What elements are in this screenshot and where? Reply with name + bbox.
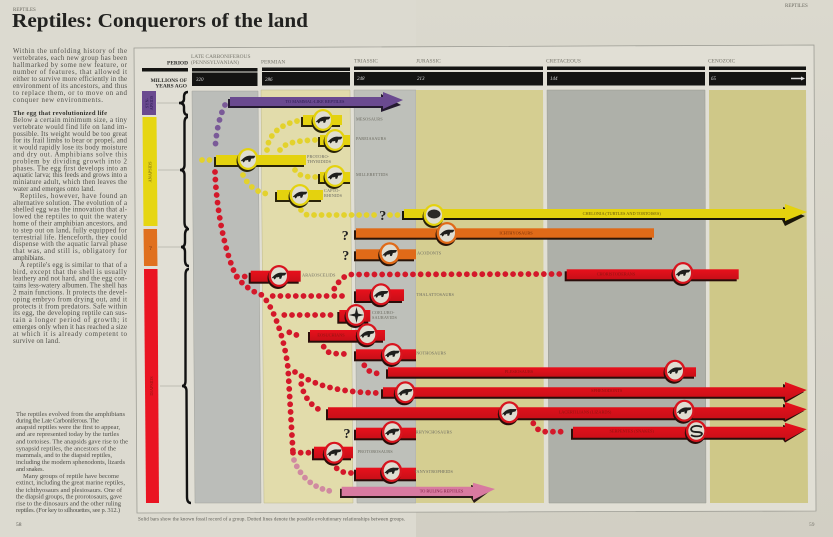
body text: the egg: problem by dividing growth into 2 xyxy=(13,158,128,165)
intro text xyxy=(13,48,128,104)
arrow: sphenodonts: SPHENODONTS xyxy=(591,388,623,393)
question marks xyxy=(342,209,386,442)
body text: the egg: that was, and still is, obligatory for xyxy=(13,248,128,255)
body text: the egg: at which it is already competent to xyxy=(13,331,128,338)
section heading: The egg that revolutionized life xyxy=(13,110,107,117)
intro text: vertebrates, each new group has been xyxy=(13,55,128,62)
body text: the egg: 2 main functions. It protects the devel- xyxy=(13,290,128,296)
period names: JURASSIC xyxy=(416,58,441,64)
arrow: to ruling reptiles: TO RULING REPTILES xyxy=(420,488,464,494)
body text: the egg: water and emerges onto land. xyxy=(13,186,95,193)
group: protorosaurs: PROTOROSAURS xyxy=(358,449,393,454)
body text: the egg: possible. Its weight would be too great xyxy=(13,131,127,138)
arrow: lacertilians: LACERTILIANS (LIZARDS) xyxy=(559,410,612,414)
body text: the egg: aquatic larva; this feeds and grows into a xyxy=(13,172,127,179)
group: coelurosauravids: SAURAVIDS xyxy=(372,315,397,320)
diapsids bar: DIAPSIDS xyxy=(149,376,154,396)
axis labels xyxy=(151,60,188,90)
caption text: reptiles. (For key to silhouettes, see p. 312.) xyxy=(16,507,120,514)
intro text: either to survive more efficiently in the xyxy=(13,76,127,83)
dates: 286 xyxy=(265,78,273,83)
dates: 65 xyxy=(711,77,716,82)
question marks: ? xyxy=(342,249,349,264)
group: plesiosaurs xyxy=(386,360,696,384)
group: captorhinids: CAPTO- xyxy=(324,188,341,193)
group: pareiasaurs xyxy=(318,129,387,153)
caption text: Many groups of reptile have become xyxy=(23,473,119,480)
icon: turtle xyxy=(428,210,440,218)
arrow: chelonia: CHELONIA (TURTLES AND TORTOISES) xyxy=(583,211,661,216)
question marks: ? xyxy=(379,209,386,224)
caption text: during the Late Carboniferous. The xyxy=(16,418,99,425)
dates: 144 xyxy=(550,77,558,82)
body text: the egg: its egg, the developing reptile can sus- xyxy=(13,310,128,317)
synapsids bar: APSIDS xyxy=(149,95,154,110)
axis labels: PERIOD xyxy=(167,60,188,66)
group: captorhinids: RHINIDS xyxy=(324,193,343,198)
panel: chart frame xyxy=(134,45,816,513)
icon: gliding reptile xyxy=(349,307,364,323)
group: placodonts: ACODONTS xyxy=(417,250,442,256)
dates: 320 xyxy=(196,78,204,83)
group: mesosaurs: MESOSAURS xyxy=(356,116,383,122)
group: coelurosauravids: COELURO- xyxy=(372,310,395,315)
body text: the egg: and dry out. Amphibians solve this xyxy=(13,152,127,158)
intro text: Within the unfolding history of the xyxy=(13,48,127,55)
caption text: The reptiles evolved from the amphibians xyxy=(16,411,125,418)
caption text: the diapsid groups, the prorotosaurs, gave xyxy=(16,494,122,501)
page header: running head and title: REPTILES xyxy=(13,8,36,13)
arrow: to ruling reptiles xyxy=(340,483,495,503)
group: thalattosaurs xyxy=(354,283,455,307)
group: protorothyridids: PROTORO- xyxy=(307,154,330,159)
body text: the egg: Reptiles, however, have found an xyxy=(20,193,128,200)
synapsids bar: SYN- xyxy=(144,97,150,108)
bracket leaders xyxy=(157,103,182,386)
body text: the egg: amphibians. xyxy=(13,255,45,262)
group: protorothyridids: THYRIDIDS xyxy=(307,159,332,164)
body text: the egg: alternative solution. The evolution of a xyxy=(13,200,127,207)
axis labels: YEARS AGO xyxy=(155,84,187,90)
dates: 213 xyxy=(417,77,425,82)
group: eosuchians xyxy=(308,323,385,347)
body text: the egg: phases. The egg first develops into an xyxy=(13,165,128,172)
running head right: REPTILES xyxy=(785,4,808,9)
caption text xyxy=(16,411,128,514)
page number 59: 59 xyxy=(809,522,815,528)
group: protorosaurs xyxy=(312,442,393,466)
body text: the egg: bird, except that the shell is usually xyxy=(13,269,128,276)
arrow: sphenodonts xyxy=(381,381,807,405)
body text: the egg: emerges only when it has reached a size xyxy=(13,324,127,331)
body text: the egg: it would rapidly lose its body moisture xyxy=(13,145,127,152)
timeline bars xyxy=(142,66,806,86)
group: mesosaurs xyxy=(301,109,383,133)
anapsids bar: ANAPSIDS xyxy=(148,161,152,183)
body text: the egg: leathery and not hard, and the egg con- xyxy=(13,276,128,283)
group: captorhinids xyxy=(275,184,343,208)
caption text: extinct, including the great marine reptiles, xyxy=(16,480,125,487)
caption text: the ichthyosaurs and plesiosaurs. One of xyxy=(16,487,123,494)
intro text: conquer new environments. xyxy=(13,97,103,104)
anapsids bar xyxy=(142,117,158,226)
axis labels: MILLIONS OF xyxy=(151,78,188,84)
group: millerettids: MILLERETTIDS xyxy=(356,172,388,177)
unknown class bar xyxy=(144,229,158,266)
body text: the egg: A reptile's egg is similar to that of a xyxy=(20,262,127,269)
caption text: mammals, and to the diapsid reptiles, xyxy=(16,452,112,459)
group: choristoderans: CHORISTODERANS xyxy=(597,272,636,276)
group: tanystropheids xyxy=(354,460,454,484)
page number 58: 58 xyxy=(16,522,22,528)
arrow: serpentes xyxy=(571,420,807,444)
body text: the egg: tain a longer period of growth; it xyxy=(13,317,127,324)
dotted lineage lines xyxy=(202,105,568,492)
arrow: chelonia xyxy=(402,204,807,228)
group: pareiasaurs: PAREIASAURS xyxy=(356,136,387,141)
group: araeoscelidians: ARAEOSCELIDS xyxy=(302,272,336,278)
period names: (PENNSYLVANIAN) xyxy=(191,59,239,66)
arrow: serpentes: SERPENTES (SNAKES) xyxy=(610,428,654,434)
body text: the egg: oping embryo from drying out, and it xyxy=(13,296,127,303)
period names: TRIASSIC xyxy=(354,58,378,64)
brackets xyxy=(179,92,191,503)
group: nothosaurs: NOTHOSAURS xyxy=(416,350,447,356)
body text: the egg: for its frail limbs to bear or propel, and xyxy=(13,138,128,145)
period names xyxy=(191,54,736,66)
intro text: to replace them, or to move on and xyxy=(13,90,128,97)
synapsids bar xyxy=(142,91,156,115)
period names: PERMIAN xyxy=(261,60,285,66)
caption text: rise to the dinosaurs and the other ruling xyxy=(16,501,122,508)
body text: the egg: protects it from predators. Safe within xyxy=(13,303,128,310)
dates xyxy=(196,77,716,83)
body text: the egg: miniature adult, which then leaves the xyxy=(13,179,127,186)
arrow: to mammal-like reptiles xyxy=(228,92,403,112)
arrow: lacertilians xyxy=(326,400,807,425)
group: protorothyridids xyxy=(214,148,332,172)
group: plesiosaurs: PLESIOSAURS xyxy=(505,369,534,374)
period names: CENOZOIC xyxy=(708,58,736,64)
body text: the egg: lowed the reptiles to quit the watery xyxy=(13,214,128,221)
body text: the egg: Below a certain minimum size, a tiny xyxy=(13,117,128,124)
caption text: including the modern sphenodonts, lizards xyxy=(16,459,125,466)
group: thalattosaurs: THALATTOSAURS xyxy=(416,292,455,297)
group: eosuchians: EOSUCHIANS xyxy=(317,332,345,338)
body text: the egg: home of their amphibian ancestors, and xyxy=(13,220,128,228)
group: choristoderans xyxy=(565,262,739,286)
group: placodonts xyxy=(354,242,442,266)
group: nothosaurs xyxy=(354,343,447,367)
body text: the egg xyxy=(13,117,128,345)
group: araeoscelidians xyxy=(249,265,336,289)
body text: the egg: to step out on land, fully equipped for xyxy=(13,227,128,234)
intro text: environment of its ancestors, and thus xyxy=(13,83,127,90)
group: coelurosauravids xyxy=(337,304,397,328)
arrow: to mammal-like reptiles: TO MAMMAL-LIKE REPTILES xyxy=(286,99,345,104)
period columns xyxy=(192,90,808,503)
class bars xyxy=(142,91,159,503)
caption text: and snakes. xyxy=(16,466,44,473)
caption text: anapsid reptiles were the first to appear, xyxy=(16,424,120,431)
body text: the egg: dispense with the aquatic larval phase xyxy=(13,241,127,248)
body text: the egg: terrestrial life. Henceforth, they could xyxy=(13,234,128,241)
unknown class bar: ? xyxy=(149,246,152,252)
group: ichthyosaurs xyxy=(354,222,654,246)
body text: the egg: shelled egg was the innovation that al- xyxy=(13,207,128,214)
intro text: hallmarked by some new feature, or xyxy=(13,62,128,69)
body text: the egg: tains less-watery albumen. The shell has xyxy=(13,283,127,290)
body text: the egg: vertebrate would find life on land im- xyxy=(13,124,128,131)
caption text: synapsid reptiles, the ancestors of the xyxy=(16,446,116,453)
question marks: ? xyxy=(344,427,350,442)
question marks: ? xyxy=(342,229,349,244)
period names: LATE CARBONIFEROUS xyxy=(191,54,250,60)
arrow: present day xyxy=(791,76,805,80)
intro text: number of features, that allowed it xyxy=(13,69,127,76)
icon: coiled snake xyxy=(691,426,702,436)
group: tanystropheids: TANYSTROPHEIDS xyxy=(414,469,454,474)
body text: the egg: survive on land. xyxy=(13,338,60,345)
page header: running head and title: Reptiles: Conquerors of the land xyxy=(12,10,309,32)
diapsids bar xyxy=(144,269,159,503)
period names: CRETACEOUS xyxy=(546,58,581,64)
caption text: and tortoises. The anapsids gave rise to the xyxy=(16,439,128,446)
caption text: and are represented today by the turtles xyxy=(16,431,119,438)
footnote: Solid bars show the known fossil record of a group. Dotted lines denote the possible evolutionary relationships between groups. xyxy=(138,518,405,522)
group: rhynchosaurs xyxy=(354,421,452,445)
group: millerettids xyxy=(318,165,388,189)
group: ichthyosaurs: ICHTHYOSAURS xyxy=(499,230,533,236)
group: rhynchosaurs: RHYNCHOSAURS xyxy=(416,430,452,434)
dates: 248 xyxy=(357,77,365,82)
